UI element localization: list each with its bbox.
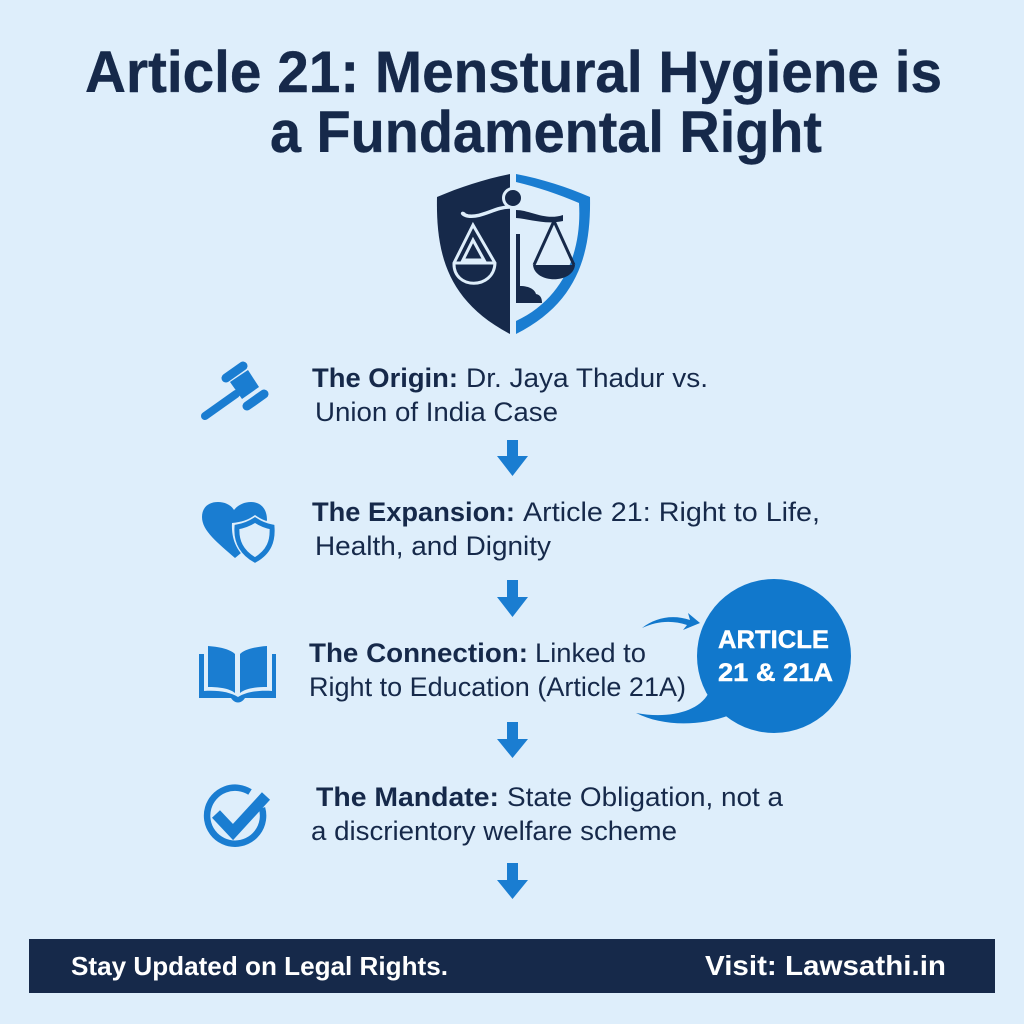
text: the expansion: The Expansion: [312, 497, 515, 527]
title [85, 40, 942, 165]
text: the mandate: a discrientory welfare scheme [311, 816, 677, 846]
step 2: the expansion [202, 497, 820, 565]
bubble text: 21 & 21A [718, 659, 833, 687]
arrow [497, 440, 528, 476]
bubble text: ARTICLE [718, 626, 829, 654]
title: Article 21: Menstural Hygiene is [85, 40, 942, 105]
text: the origin: Union of India Case [315, 397, 558, 427]
text: the connection: Right to Education (Article 21A) [309, 672, 686, 702]
footer bar [29, 939, 995, 993]
footer left text: Stay Updated on Legal Rights. [71, 951, 448, 981]
icon: open book [199, 646, 276, 702]
icon: shield with scales of justice [437, 170, 590, 338]
text: the connection: The Connection: [309, 638, 528, 668]
title: a Fundamental Right [270, 100, 822, 165]
icon: heart and shield [202, 502, 276, 565]
step 3: the connection [199, 638, 686, 702]
icon: gavel [205, 366, 264, 416]
arrow [497, 580, 528, 617]
speech bubble [636, 579, 851, 733]
callout: article 21 and 21A [636, 579, 851, 733]
arrow [497, 863, 528, 899]
text: the origin: The Origin: [312, 363, 458, 393]
text: the mandate: The Mandate: [316, 782, 499, 812]
text: the origin: Dr. Jaya Thadur vs. [466, 363, 708, 393]
text: the mandate: State Obligation, not a [507, 782, 784, 812]
text: the connection: Linked to [535, 638, 646, 668]
text: the expansion: Health, and Dignity [315, 531, 552, 561]
icon: check circle [207, 788, 266, 844]
step 1: the origin [205, 363, 708, 427]
footer right text: Visit: Lawsathi.in [705, 950, 946, 981]
text: the expansion: Article 21: Right to Life, [523, 497, 820, 527]
arrow [497, 722, 528, 758]
curved arrow [642, 613, 700, 630]
step 4: the mandate [207, 782, 784, 846]
